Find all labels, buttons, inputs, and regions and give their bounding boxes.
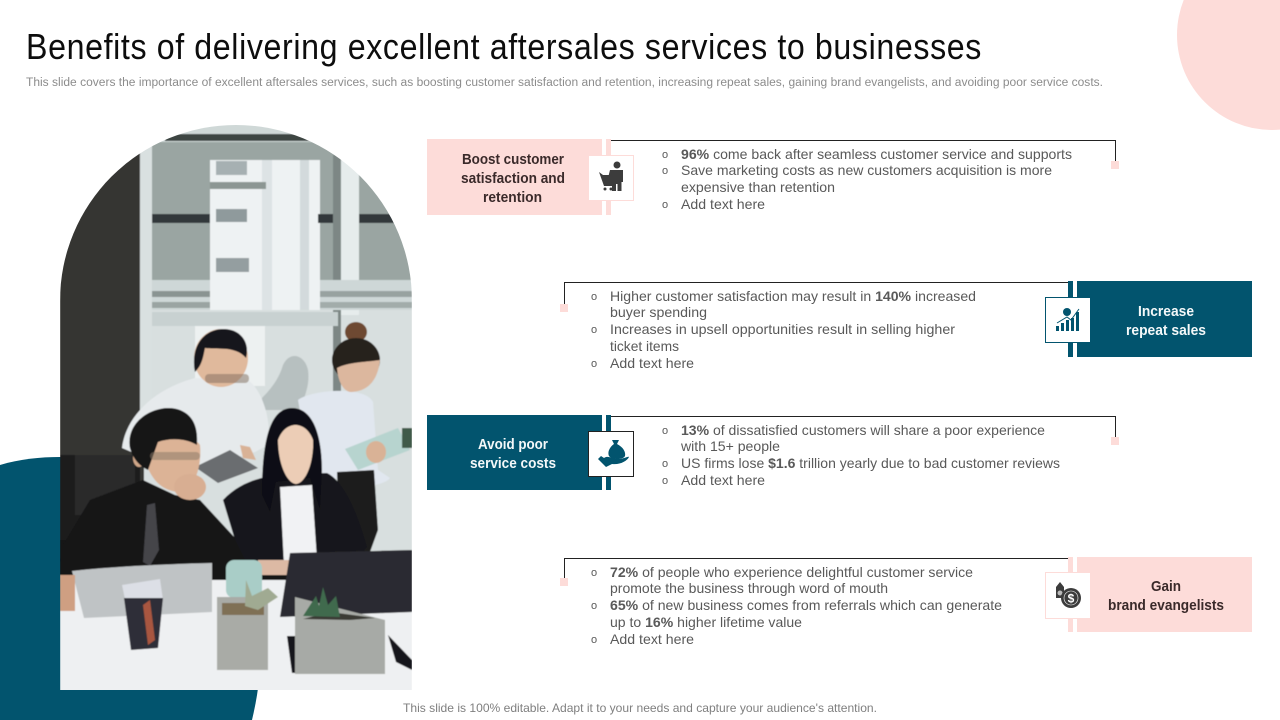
- heading: gain brand evangelists: Gain: [1151, 578, 1181, 595]
- bullet list: boost customer: Save marketing costs as new customers acquisition is more: [681, 162, 1052, 178]
- heading: increase repeat sales: repeat sales: [1126, 322, 1206, 339]
- bullet list: increase repeat sales: o: [591, 291, 597, 303]
- bullet list: gain brand evangelists: o: [591, 634, 597, 646]
- bullet list: gain brand evangelists: 65% of new business comes from referrals which can generate: [610, 597, 1002, 613]
- footer note: This slide is 100% editable. Adapt it to your needs and capture your audience's attention.: [403, 701, 877, 715]
- heading: avoid poor service costs: [470, 436, 556, 472]
- bullet list: gain brand evangelists: promote the business through word of mouth: [610, 580, 888, 596]
- icon: price tag and dollar coin: $: [1068, 592, 1075, 606]
- panel: avoid poor service costs: [427, 415, 1119, 490]
- panel: increase repeat sales: [560, 281, 1252, 371]
- bullet list: boost customer: o: [662, 199, 668, 211]
- bullet list: increase repeat sales: buyer spending: [610, 304, 707, 320]
- panel: boost customer satisfaction: [427, 139, 1119, 215]
- bullet list: increase repeat sales: Increases in upsell opportunities result in selling higher: [610, 321, 955, 337]
- bullet list: avoid poor service costs: o: [662, 425, 668, 437]
- heading: increase repeat sales: [1126, 303, 1206, 339]
- heading: boost customer: satisfaction and: [461, 170, 565, 187]
- bullet list: avoid poor service costs: with 15+ people: [680, 438, 780, 454]
- bullet list: increase repeat sales: o: [591, 324, 597, 336]
- heading: boost customer: retention: [483, 189, 542, 206]
- bullet list: gain brand evangelists: o: [591, 567, 597, 579]
- bullet list: gain brand evangelists: Add text here: [610, 631, 694, 647]
- bullet list: boost customer: expensive than retention: [681, 179, 835, 195]
- icon: growth chart: [1046, 298, 1090, 342]
- icon: shopper with cart: [588, 156, 634, 200]
- bullet list: increase repeat sales: Add text here: [610, 355, 694, 371]
- bullet list: avoid poor service costs: US firms lose $1.6 trillion yearly due to bad customer reviews: [681, 455, 1060, 471]
- title: Benefits of delivering excellent aftersales services to businesses: [26, 26, 982, 67]
- bullet list: increase repeat sales: [591, 288, 976, 371]
- bullet list: gain brand evangelists: up to 16% higher lifetime value: [610, 614, 802, 630]
- icon: price tag and dollar coin: [1046, 572, 1090, 618]
- bullet list: increase repeat sales: ticket items: [610, 338, 679, 354]
- bullet list: avoid poor service costs: 13% of dissatisfied customers will share a poor experience: [681, 422, 1045, 438]
- bullet list: boost customer: 96% come back after seamless customer service and supports: [681, 146, 1072, 162]
- decorative teal shape bottom left: [0, 457, 261, 720]
- heading: avoid poor service costs: service costs: [470, 455, 556, 472]
- heading: gain brand evangelists: [1108, 578, 1224, 614]
- bullet list: gain brand evangelists: 72% of people who experience delightful customer service: [610, 564, 973, 580]
- heading: increase repeat sales: Increase: [1138, 303, 1194, 320]
- bullet list: gain brand evangelists: [591, 564, 1002, 647]
- notebook: [345, 428, 410, 470]
- arched team photo: [60, 120, 412, 695]
- bullet list: gain brand evangelists: o: [591, 600, 597, 612]
- bullet list: increase repeat sales: o: [591, 358, 597, 370]
- decorative pink circle top right: [1177, 0, 1280, 130]
- bullet list: avoid poor service costs: [662, 422, 1060, 488]
- bullet list: boost customer: [662, 146, 1072, 212]
- bullet list: boost customer: Add text here: [681, 196, 765, 212]
- bullet list: avoid poor service costs: o: [662, 475, 668, 487]
- heading: boost customer: Boost customer: [462, 151, 564, 168]
- heading: boost customer: [461, 151, 565, 206]
- icon: hand holding money bag: [588, 432, 634, 476]
- panel: gain brand evangelists: [560, 557, 1252, 647]
- heading: gain brand evangelists: brand evangelists: [1108, 597, 1224, 614]
- subtitle: This slide covers the importance of excellent aftersales services, such as boosting customer satisfaction and retention, increasing repeat sales, gaining brand evangelists, and avoiding poor service costs.: [26, 77, 1103, 89]
- bullet list: boost customer: o: [662, 149, 668, 161]
- bullet list: boost customer: o: [662, 165, 668, 177]
- bullet list: increase repeat sales: Higher customer satisfaction may result in 140% increased: [610, 288, 976, 304]
- bullet list: avoid poor service costs: o: [662, 458, 668, 470]
- heading: avoid poor service costs: Avoid poor: [478, 436, 548, 453]
- bullet list: avoid poor service costs: Add text here: [681, 472, 765, 488]
